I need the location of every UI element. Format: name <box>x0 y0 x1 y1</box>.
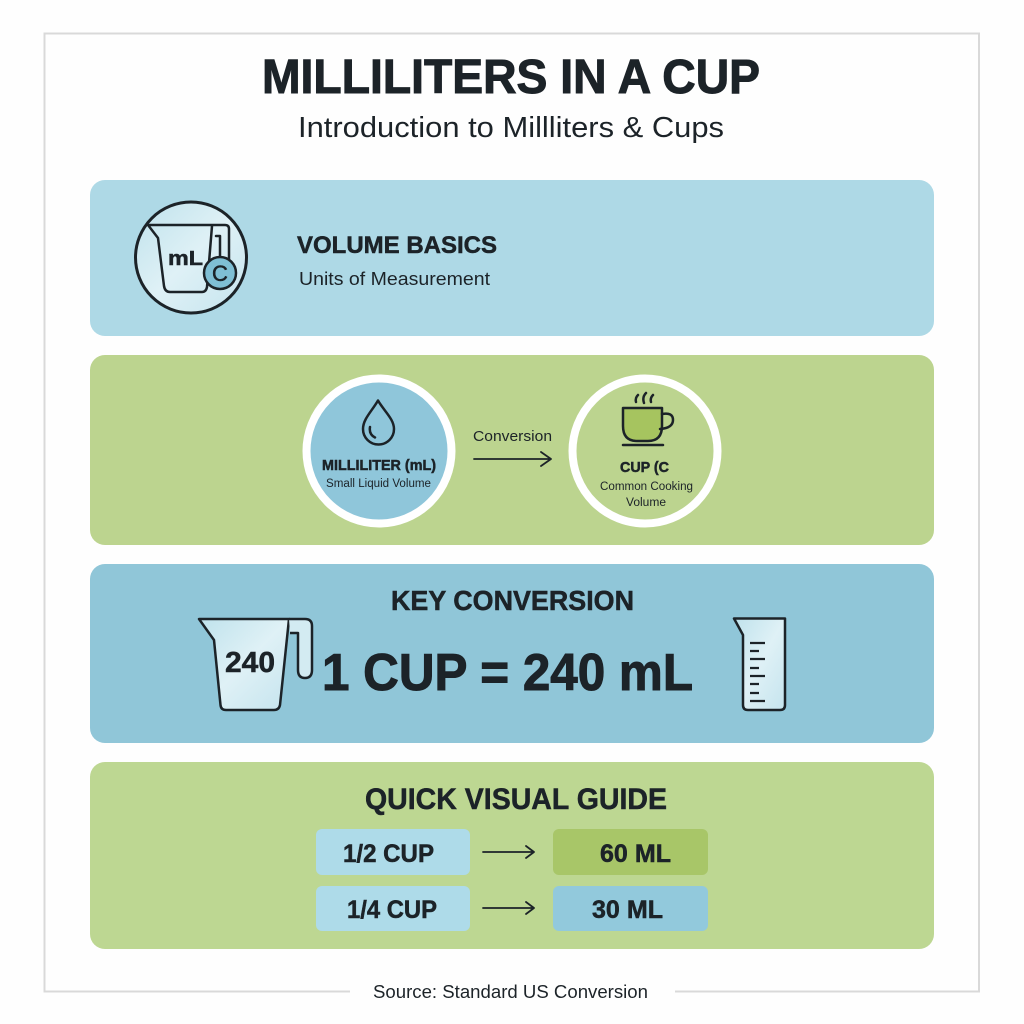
heading: quick visual guide: QUICK VISUAL GUIDE <box>365 783 667 816</box>
heading: key conversion: KEY CONVERSION <box>391 585 634 616</box>
cup circle <box>572 378 718 524</box>
icon: measuring jug 240 <box>199 619 312 710</box>
icon: graduated beaker <box>734 618 785 710</box>
formula: 1 cup = 240 ml: 1 CUP = 240 mL <box>322 644 693 702</box>
icon: water drop <box>363 400 394 444</box>
row: 1/4 cup to 30 ml: 30 ML <box>592 896 663 924</box>
icon: measuring jug 240: 240 <box>225 647 275 679</box>
milliliter circle: Small Liquid Volume <box>326 478 431 490</box>
subtitle: Introduction to Millliters & Cups <box>298 112 724 144</box>
row: 1/2 cup to 60 ml <box>316 829 708 875</box>
heading: volume basics: VOLUME BASICS <box>297 232 497 259</box>
title: MILLILITERS IN A CUP <box>262 51 760 104</box>
panel: milliliter to cup <box>90 355 934 545</box>
icon: measuring cup with mL and C badge: mL <box>168 248 203 270</box>
row: 1/2 cup to 60 ml: 1/2 CUP <box>343 840 434 868</box>
panel: quick visual guide <box>90 762 934 949</box>
text: units of measurement: Units of Measurement <box>299 268 490 289</box>
arrow: conversion <box>474 452 551 466</box>
cup circle: CUP (C <box>620 459 669 476</box>
panel: key conversion <box>90 564 934 743</box>
cup circle: Common Cooking <box>600 481 693 493</box>
row: 1/2 cup to 60 ml: 60 ML <box>600 840 671 868</box>
row: 1/4 cup to 30 ml <box>316 886 708 931</box>
cup circle: Volume <box>626 497 666 509</box>
conversion label: Conversion <box>473 429 552 445</box>
panel: volume basics <box>90 180 934 336</box>
source note: Source: Standard US Conversion <box>373 982 648 1002</box>
icon: measuring cup with mL and C badge: C <box>212 261 228 286</box>
row: 1/4 cup to 30 ml: 1/4 CUP <box>347 896 437 924</box>
icon: measuring cup with mL and C badge <box>136 202 246 313</box>
icon: coffee cup <box>623 393 673 445</box>
milliliter circle <box>306 378 452 524</box>
milliliter circle: MILLILITER (mL) <box>322 458 436 474</box>
